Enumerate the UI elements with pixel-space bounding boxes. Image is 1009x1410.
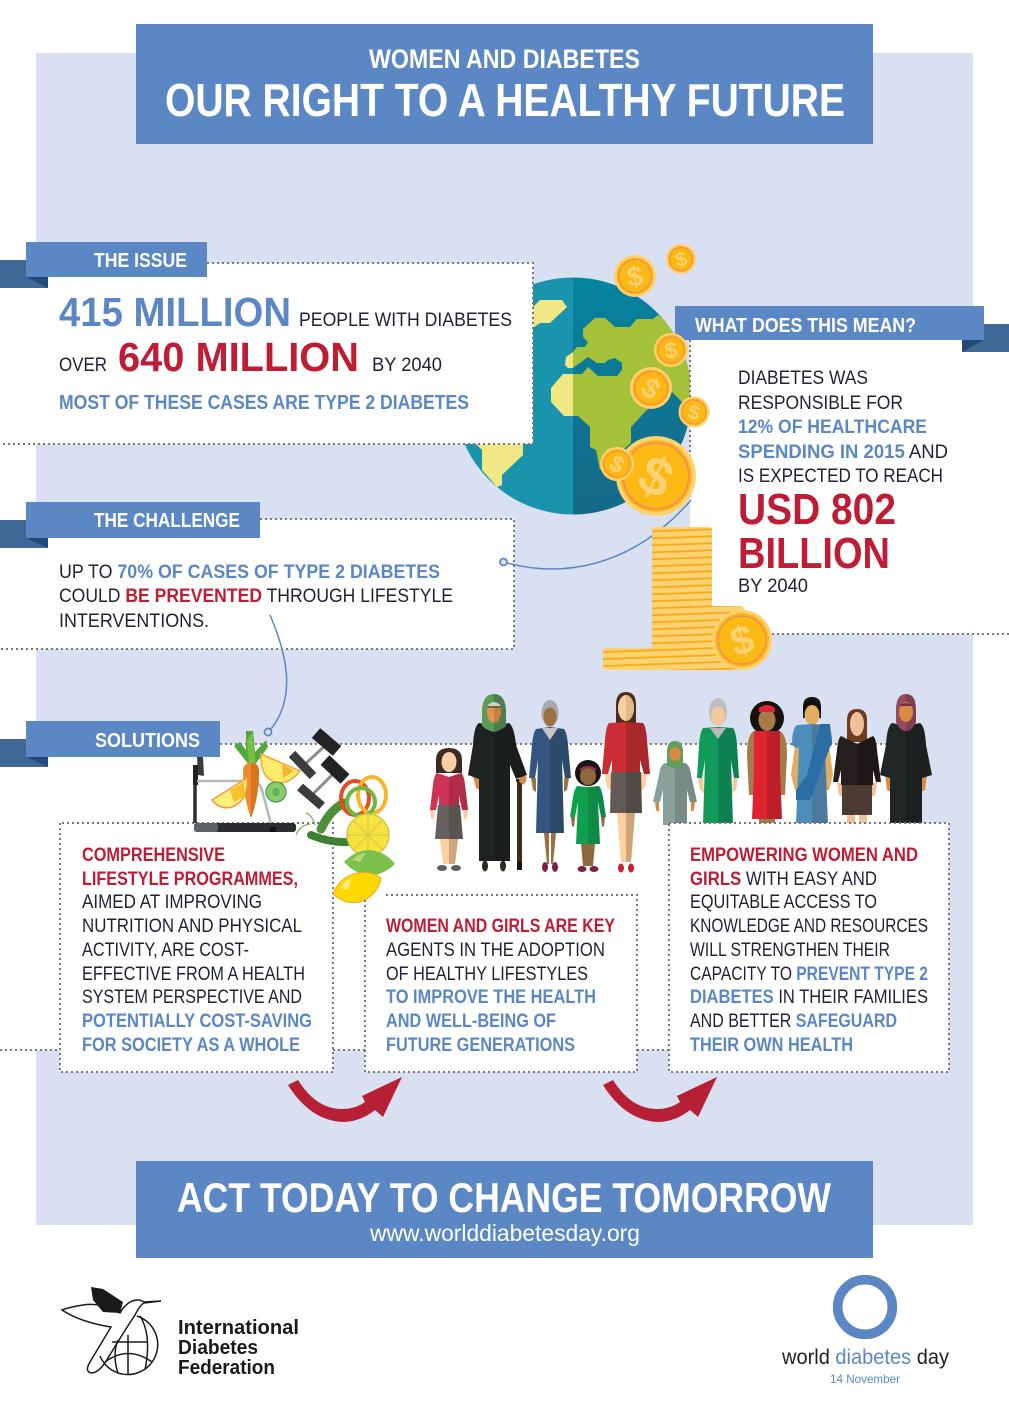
panel: the issue: PEOPLE WITH DIABETES bbox=[299, 310, 512, 331]
logo: world diabetes day bbox=[781, 1280, 949, 1386]
footer banner: www.worlddiabetesday.org bbox=[369, 1220, 640, 1246]
logo: International Diabetes Federation: International bbox=[178, 1317, 299, 1339]
solution box 2: women and girls: AGENTS IN THE ADOPTION bbox=[386, 940, 605, 961]
icon: coin big bbox=[616, 436, 696, 516]
solution box 3: empowering women: KNOWLEDGE AND RESOURCES bbox=[690, 916, 928, 937]
figure: woman in red top and skirt bbox=[602, 692, 650, 872]
figure: woman in black robe with maroon hijab bbox=[880, 694, 932, 825]
panel: what does this mean bbox=[690, 335, 1009, 634]
icon: coin right bbox=[678, 396, 710, 428]
logo: International Diabetes Federation: Federation bbox=[178, 1357, 275, 1379]
panel: the issue: BY 2040 bbox=[372, 355, 442, 376]
text: what does this mean: IS EXPECTED TO REACH bbox=[738, 466, 943, 487]
solution box 1: lifestyle programmes bbox=[60, 823, 333, 1072]
text: what does this mean bbox=[738, 368, 948, 597]
solution box 3: empowering women: GIRLS WITH EASY AND bbox=[690, 869, 877, 890]
tag: what does this mean: WHAT DOES THIS MEAN? bbox=[695, 315, 916, 337]
solution box 3: empowering women: DIABETES IN THEIR FAMILIES bbox=[690, 987, 928, 1008]
icon: coin beside big: $ bbox=[605, 450, 629, 479]
solution box 3: empowering women bbox=[669, 823, 949, 1072]
footer banner bbox=[136, 1161, 873, 1258]
icon: coin beside big bbox=[600, 447, 634, 481]
illustration: peas bbox=[296, 803, 348, 842]
solution box 2: women and girls: OF HEALTHY LIFESTYLES bbox=[386, 964, 588, 985]
icon: coin big: $ bbox=[629, 443, 682, 510]
text: what does this mean: USD 802 bbox=[738, 485, 896, 534]
icon: coin small top bbox=[666, 244, 696, 274]
figure: woman in red dress bbox=[747, 701, 787, 825]
text: what does this mean: SPENDING IN 2015 AND bbox=[738, 442, 948, 463]
arrow: box 1 to box 2 bbox=[288, 1077, 402, 1122]
header banner: OUR RIGHT TO A HEALTHY FUTURE bbox=[165, 74, 845, 126]
icon: coin large on stack bbox=[712, 610, 772, 670]
logo: world diabetes day: 14 November bbox=[830, 1372, 900, 1386]
panel: the issue: 640 MILLION bbox=[118, 334, 359, 380]
text: what does this mean: DIABETES WAS bbox=[738, 368, 868, 389]
tag: solutions bbox=[0, 721, 220, 767]
figure: small girl in green dress bbox=[570, 760, 606, 872]
text: what does this mean: RESPONSIBLE FOR bbox=[738, 393, 903, 414]
illustration: treadmill bbox=[193, 757, 296, 832]
solution box 3: empowering women: AND BETTER SAFEGUARD bbox=[690, 1011, 897, 1032]
solution box 1: lifestyle programmes: EFFECTIVE FROM A HEALTH bbox=[82, 964, 305, 985]
solution box 3: empowering women: WILL STRENGTHEN THEIR bbox=[690, 940, 890, 961]
panel: the challenge bbox=[0, 519, 514, 649]
icon: coin on globe middle: $ bbox=[635, 371, 666, 406]
solution box 2: women and girls: TO IMPROVE THE HEALTH bbox=[386, 987, 596, 1008]
light blue background panel bbox=[36, 53, 973, 1225]
solution box 3: empowering women: CAPACITY TO PREVENT TYPE 2 bbox=[690, 964, 928, 985]
solution box 1: lifestyle programmes: ACTIVITY, ARE COST- bbox=[82, 940, 249, 961]
icon: coin top: $ bbox=[625, 260, 645, 293]
figure: child in green hijab and grey robe bbox=[653, 741, 697, 825]
illustration: lime bbox=[344, 850, 395, 876]
header banner bbox=[136, 24, 873, 144]
solution box 1: lifestyle programmes: FOR SOCIETY AS A WHOLE bbox=[82, 1035, 300, 1056]
solution box 1: lifestyle programmes: COMPREHENSIVE bbox=[82, 845, 225, 866]
tag: the issue bbox=[0, 242, 207, 288]
illustration: carrot and citrus bbox=[212, 731, 300, 818]
solution box 2: women and girls: FUTURE GENERATIONS bbox=[386, 1035, 575, 1056]
icon: coin large on stack: $ bbox=[726, 617, 759, 665]
tag: the issue: THE ISSUE bbox=[94, 250, 187, 272]
figure: woman in black jacket and skirt bbox=[833, 709, 881, 825]
tag: what does this mean bbox=[675, 306, 1009, 352]
tag: the challenge: THE CHALLENGE bbox=[94, 510, 240, 532]
figure: elderly woman in green dress bbox=[697, 698, 739, 825]
figure: girl in red top bbox=[430, 748, 468, 871]
tag: the challenge bbox=[0, 502, 260, 548]
tag: solutions: SOLUTIONS bbox=[95, 730, 200, 752]
arrow: box 2 to box 3 bbox=[603, 1077, 717, 1122]
figure: woman in blue sari bbox=[791, 697, 833, 825]
panel: solutions background bbox=[0, 744, 905, 1050]
connector line: challenge to cost bbox=[500, 500, 691, 569]
solution box 1: lifestyle programmes: POTENTIALLY COST-SAVING bbox=[82, 1011, 312, 1032]
illustration: lemon slice bbox=[347, 814, 389, 856]
solution box 1: lifestyle programmes: SYSTEM PERSPECTIVE AND bbox=[82, 987, 302, 1008]
panel: the challenge: INTERVENTIONS. bbox=[59, 611, 209, 632]
solution box 1: lifestyle programmes: NUTRITION AND PHYSICAL bbox=[82, 916, 302, 937]
solution box 1: lifestyle programmes: AIMED AT IMPROVING bbox=[82, 892, 262, 913]
panel: the issue: 415 MILLION bbox=[59, 289, 291, 335]
figure: elderly woman in blue dress bbox=[529, 700, 571, 872]
text: what does this mean: 12% OF HEALTHCARE bbox=[738, 417, 927, 438]
solution box 2: women and girls bbox=[365, 895, 637, 1072]
icon: coin on globe bbox=[654, 333, 688, 367]
panel: the issue: MOST OF THESE CASES ARE TYPE 2 DIABETES bbox=[59, 392, 469, 414]
solution box 3: empowering women: EMPOWERING WOMEN AND bbox=[690, 845, 918, 866]
connector line: challenge to solutions bbox=[264, 615, 287, 736]
solution box 2: women and girls: WOMEN AND GIRLS ARE KEY bbox=[386, 916, 615, 937]
coin stacks bbox=[603, 527, 744, 670]
solution box 1: lifestyle programmes: LIFESTYLE PROGRAMMES, bbox=[82, 869, 298, 890]
footer banner: ACT TODAY TO CHANGE TOMORROW bbox=[177, 1174, 831, 1221]
panel: the issue bbox=[0, 263, 533, 444]
icon: coin right: $ bbox=[686, 401, 702, 425]
logo: International Diabetes Federation: Diabetes bbox=[178, 1337, 258, 1359]
icon: coin on globe: $ bbox=[663, 336, 679, 364]
panel: the challenge: COULD BE PREVENTED THROUGH LIFESTYLE bbox=[59, 586, 453, 607]
text: what does this mean: BILLION bbox=[738, 529, 890, 578]
logo: world diabetes day: world diabetes day bbox=[781, 1346, 949, 1369]
solution box 3: empowering women: THEIR OWN HEALTH bbox=[690, 1035, 853, 1056]
text: what does this mean: BY 2040 bbox=[738, 576, 808, 597]
icon: coin small top: $ bbox=[673, 248, 689, 272]
illustration: dumbbells bbox=[292, 733, 345, 806]
figure: woman in black robe with green hijab and cane bbox=[468, 694, 527, 872]
solution box 3: empowering women: EQUITABLE ACCESS TO bbox=[690, 892, 877, 913]
icon: coin on globe middle bbox=[630, 367, 672, 409]
header banner: WOMEN AND DIABETES bbox=[369, 44, 640, 74]
solution box 2: women and girls: AND WELL-BEING OF bbox=[386, 1011, 556, 1032]
icon: coin top bbox=[614, 255, 656, 297]
panel: the issue: OVER bbox=[59, 355, 107, 376]
logo: International Diabetes Federation bbox=[62, 1287, 299, 1379]
illustration: peppers bbox=[341, 777, 386, 816]
globe illustration bbox=[454, 277, 693, 515]
panel: the challenge: UP TO 70% OF CASES OF TYPE 2 DIABETES bbox=[59, 562, 440, 583]
illustration: lemon bbox=[333, 873, 381, 903]
